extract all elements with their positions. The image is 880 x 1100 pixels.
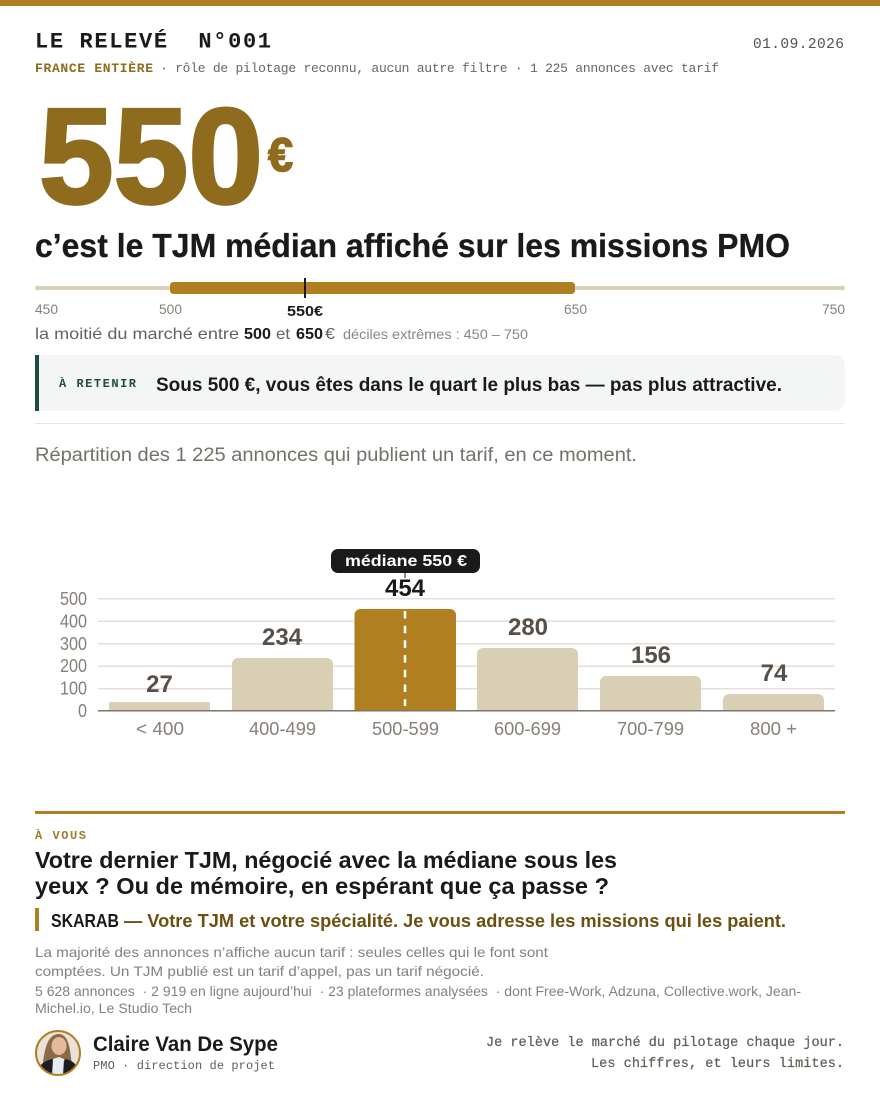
y axis labels: 500 <box>60 589 87 609</box>
sources line <box>35 984 801 1016</box>
closing statement: Je relève le marché du pilotage chaque jour. <box>486 1036 844 1051</box>
y axis labels: 400 <box>60 612 87 632</box>
interquartile sentence: € <box>325 326 335 343</box>
section rule <box>35 811 845 814</box>
range labels: 750 <box>822 302 845 317</box>
hero number 550 euros: 550 <box>39 80 263 232</box>
call to action heading: Votre dernier TJM, négocié avec la médiane sous les <box>35 847 617 873</box>
interquartile sentence: 650 <box>296 326 323 343</box>
x axis labels: 800 + <box>750 719 797 739</box>
callout: à retenir <box>35 355 845 411</box>
median pill: médiane 550 € <box>345 553 467 570</box>
section eyebrow: À VOUS <box>35 828 86 843</box>
author portrait <box>35 1030 81 1076</box>
value labels: 74 <box>761 660 788 687</box>
value labels: 27 <box>146 671 173 698</box>
author name: Claire Van De Sype <box>93 1033 278 1056</box>
Skarab offer line: SKARAB <box>51 911 119 931</box>
y axis labels: 0 <box>78 701 87 721</box>
top accent bar <box>0 0 880 6</box>
callout: à retenir: À RETENIR <box>59 376 137 391</box>
y axis labels: 200 <box>60 656 87 676</box>
sources line: Michel.io, Le Studio Tech <box>35 1001 192 1016</box>
author role: PMO · direction de projet <box>93 1059 275 1073</box>
sources line: 5 628 annonces · 2 919 en ligne aujourd’hui · 23 plateformes analysées · dont Free-Work, Adzuna, Collective.work, Jean- <box>35 984 801 999</box>
bar chart <box>60 549 835 739</box>
median dashed line <box>404 611 406 706</box>
main heading: c’est le TJM médian affiché sur les missions PMO <box>35 227 790 264</box>
closing statement <box>486 1036 844 1072</box>
y axis labels: 300 <box>60 634 87 654</box>
interquartile sentence: la moitié du marché entre <box>35 326 239 343</box>
value labels: 156 <box>631 642 671 669</box>
y axis labels: 100 <box>60 678 87 698</box>
value labels: 454 <box>385 575 426 602</box>
value labels <box>146 575 788 698</box>
methodology note: comptées. Un TJM publié est un tarif d’appel, pas un tarif négocié. <box>35 963 484 979</box>
call to action heading <box>35 847 617 899</box>
interquartile sentence: déciles extrêmes : 450 – 750 <box>343 326 528 342</box>
range labels: 500 <box>159 302 182 317</box>
hero number 550 euros: € <box>268 128 293 181</box>
value labels: 234 <box>262 624 303 651</box>
issue date: 01.09.2026 <box>753 37 844 53</box>
bars <box>109 648 824 711</box>
x axis labels: < 400 <box>136 719 184 739</box>
range bar <box>35 278 845 298</box>
call to action heading: yeux ? Ou de mémoire, en espérant que ça passe ? <box>35 873 609 899</box>
Skarab offer line: — Votre TJM et votre spécialité. Je vous adresse les missions qui les paient. <box>124 911 786 931</box>
highlighted median bar <box>354 609 456 711</box>
methodology note: La majorité des annonces n’affiche aucun tarif : seules celles qui le font sont <box>35 944 548 960</box>
value labels: 280 <box>508 614 548 641</box>
scope line: FRANCE ENTIÈRE <box>35 61 153 76</box>
y axis labels <box>60 589 87 721</box>
median pill <box>331 549 480 578</box>
methodology note <box>35 944 548 979</box>
chart intro text: Répartition des 1 225 annonces qui publient un tarif, en ce moment. <box>35 445 637 466</box>
masthead title: LE RELEVÉ N°001 <box>35 28 271 54</box>
x axis labels: 700-799 <box>617 719 684 739</box>
x axis labels: 400-499 <box>249 719 316 739</box>
x axis labels: 500-599 <box>372 719 439 739</box>
range labels <box>35 302 845 320</box>
callout: à retenir: Sous 500 €, vous êtes dans le quart le plus bas — pas plus attractive. <box>156 375 782 396</box>
interquartile sentence: 500 <box>244 326 271 343</box>
x axis labels <box>136 719 797 739</box>
range labels: 650 <box>564 302 587 317</box>
interquartile sentence <box>35 326 528 343</box>
range labels: 550€ <box>287 304 323 320</box>
x axis labels: 600-699 <box>494 719 561 739</box>
interquartile sentence: et <box>276 326 291 343</box>
closing statement: Les chiffres, et leurs limites. <box>591 1057 844 1072</box>
scope line: · rôle de pilotage reconnu, aucun autre filtre · 1 225 annonces avec tarif <box>160 61 719 76</box>
range labels: 450 <box>35 302 58 317</box>
